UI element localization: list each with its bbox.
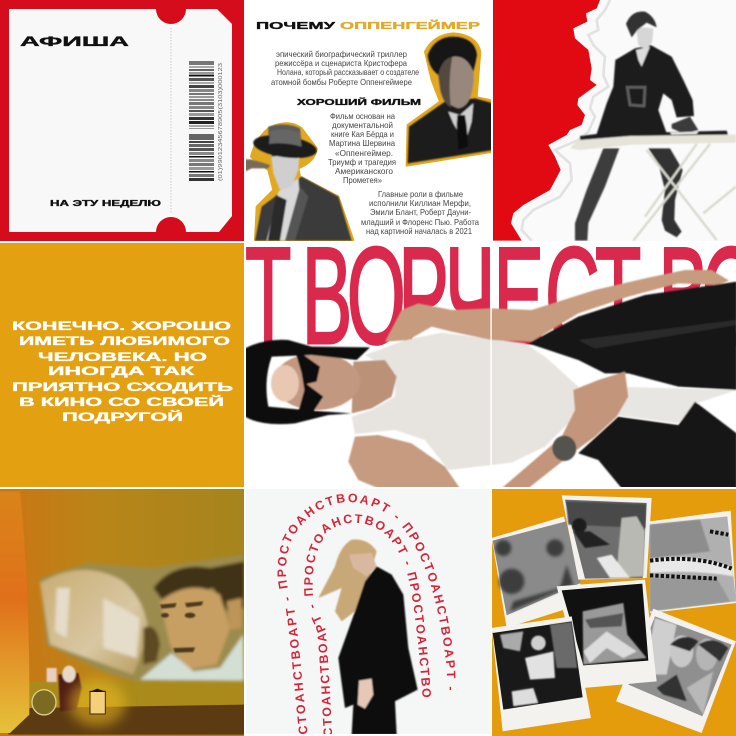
barcode xyxy=(189,61,214,181)
paragraph: film summary: эпический биографический триллер xyxy=(276,49,407,59)
quote text: ПРИЯТНО СХОДИТЬ xyxy=(12,382,233,394)
neck xyxy=(352,360,397,413)
quote text: ПОДРУГОЙ xyxy=(62,411,183,424)
panel: woman ironing xyxy=(490,0,736,242)
white tank top xyxy=(352,333,578,470)
panel: blonde woman with text arch xyxy=(246,489,491,734)
paragraph: book basis: «Оппенгеймер. xyxy=(335,148,393,158)
blonde woman in black suit xyxy=(318,539,418,735)
wicker chair xyxy=(32,690,56,715)
paragraph: book basis: документальной xyxy=(332,120,393,130)
face xyxy=(273,353,360,410)
barcode digits: (01)99012345678905(3103)000123 xyxy=(218,63,224,181)
paragraph: book basis: Фильм основан на xyxy=(330,111,395,121)
quote text: ИМЕТЬ ЛЮБИМОГО xyxy=(19,336,230,348)
top arm xyxy=(385,270,729,342)
paragraph: film summary: режиссёра и сценариста Кристофера xyxy=(275,58,407,68)
black jacket lower xyxy=(578,402,736,488)
sunglasses xyxy=(296,354,324,412)
floor band xyxy=(29,681,157,706)
panel background xyxy=(246,0,491,241)
outer text arch: СТОАНСТВОАРТ - ПРОСТОАНСТВОАРТ - ПРОСТОАНСТВОАРТ - xyxy=(277,494,456,734)
projection of film scene xyxy=(40,555,244,681)
hair xyxy=(245,340,370,424)
paragraph: cast: Главные роли в фильме xyxy=(378,189,463,199)
white shirt panel xyxy=(615,387,736,423)
orange background xyxy=(490,488,736,736)
ticket title: АФИША xyxy=(20,34,129,49)
panel: creativity double tile xyxy=(246,246,736,487)
wristwatch xyxy=(552,436,576,461)
glowing lantern xyxy=(69,680,126,726)
paragraph: book basis: Американского xyxy=(335,166,393,176)
paragraph: film summary: атомной бомбы Роберте Оппенгеймере xyxy=(271,77,412,87)
torn paper shadow xyxy=(522,0,610,241)
black jacket upper xyxy=(528,282,736,390)
paragraph: book basis: Прометея» xyxy=(343,175,382,185)
tile divider xyxy=(490,308,492,466)
white background xyxy=(245,240,736,490)
quote text: КОНЕЧНО. ХОРОШО xyxy=(12,321,231,333)
ticket white card xyxy=(9,9,232,232)
photo: crowd scene xyxy=(492,516,585,628)
paragraph: cast: над картиной началась в 2021 xyxy=(366,226,472,236)
paragraph: book basis: Триумф и трагедия xyxy=(328,157,396,167)
inner text arch: СТОАНСТВОАРТ - ПРОСТОАНСТВОАРТ - ПРОСТОАНСТВО xyxy=(304,514,431,734)
paragraph: cast xyxy=(361,189,479,236)
paragraph: film summary: Нолана, который рассказывает о создателе xyxy=(277,67,419,77)
white background xyxy=(490,0,736,242)
curtain xyxy=(0,491,29,733)
background xyxy=(245,488,493,736)
portrait: young man in suit xyxy=(245,33,493,241)
floor xyxy=(8,705,247,735)
subheading: good film: ХОРОШИЙ ФИЛЬМ xyxy=(297,96,421,107)
torn red shape xyxy=(493,0,600,241)
wall xyxy=(0,488,245,736)
panel: ticket xyxy=(0,0,244,241)
paragraph: cast: младший и Флоренс Пью. Работа xyxy=(361,217,479,227)
photo: film strip xyxy=(649,511,736,613)
paragraph: book basis: Мартина Шервина xyxy=(329,138,395,148)
panel: scattered photos xyxy=(490,488,736,736)
paragraph: film summary xyxy=(271,49,419,87)
quote text: ИНОГДА ТАК xyxy=(48,366,196,378)
face details on screen xyxy=(160,601,203,653)
woman at ironing board xyxy=(570,11,736,241)
panel: projector room xyxy=(0,488,247,736)
quote text xyxy=(12,321,233,424)
ticket subtitle: НА ЭТУ НЕДЕЛЮ xyxy=(50,199,161,208)
quote text: ЧЕЛОВЕКА. НО xyxy=(38,352,207,364)
quote text: В КИНО СО СВОЕЙ xyxy=(19,396,224,409)
heading: why Oppenheimer: ПОЧЕМУ xyxy=(256,21,336,32)
paragraph: book basis xyxy=(328,111,396,185)
photo: woman with bob xyxy=(557,580,657,688)
bottom arm xyxy=(348,435,460,488)
photo: woman in white blouse xyxy=(492,616,591,731)
heading: why Oppenheimer: ОППЕНГЕЙМЕР xyxy=(340,19,481,32)
panel: why Oppenheimer xyxy=(245,0,493,241)
perforation line xyxy=(170,28,172,214)
paragraph: cast: исполнили Киллиан Мерфи, xyxy=(369,198,471,208)
photo: couple at table xyxy=(562,495,652,580)
hand and wrist xyxy=(502,372,628,488)
ticket red background xyxy=(0,0,244,241)
heading: why Oppenheimer xyxy=(256,20,480,30)
paragraph: book basis: книге Кая Бёрда и xyxy=(331,129,394,139)
woman lying with sunglasses xyxy=(245,270,736,488)
quote background xyxy=(0,243,244,487)
paragraph: cast: Эмили Блант, Роберт Дауни- xyxy=(370,207,471,217)
photo: couple embracing xyxy=(616,609,736,733)
panel: orange quote xyxy=(0,243,244,487)
santa figurine xyxy=(47,666,82,711)
portrait: man in hat with pipe xyxy=(245,123,353,241)
